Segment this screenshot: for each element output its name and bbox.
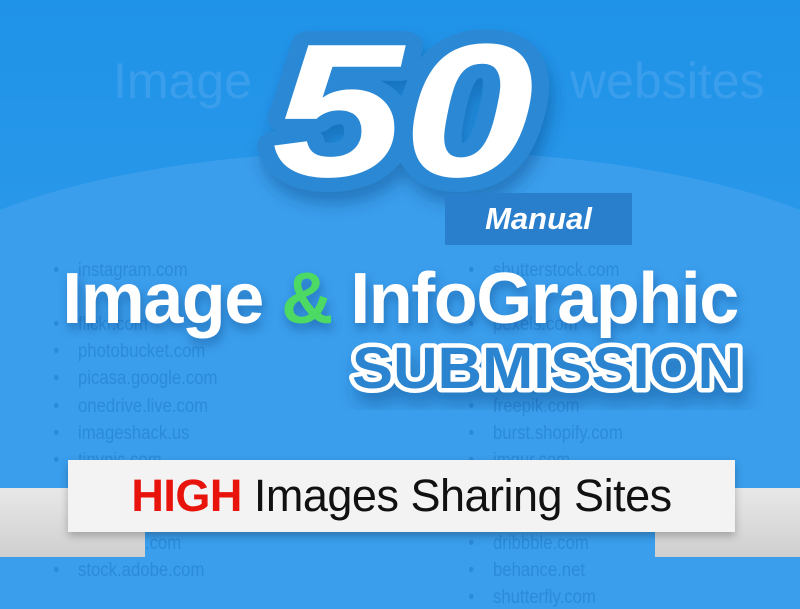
- Manual label: Manual: [485, 201, 592, 236]
- faint site list right: shutterfly.com: [493, 587, 596, 608]
- faint site list left: flickr.com: [78, 314, 148, 335]
- faint background heading: [113, 53, 765, 109]
- faint site list left: photobucket.com: [78, 341, 205, 362]
- ribbon right tail: [655, 488, 800, 557]
- faint site list left: unsplash.com: [78, 533, 181, 554]
- Manual label: [445, 193, 632, 245]
- background top band: [0, 0, 800, 250]
- text: Image: [113, 53, 252, 109]
- main title: Image & InfoGraphic: [62, 259, 738, 339]
- faint site list right: behance.net: [493, 560, 585, 581]
- faint site list right: shutterstock.com: [493, 260, 619, 281]
- ribbon banner: HIGH Images Sharing Sites: [131, 470, 672, 521]
- background wave: [0, 150, 800, 450]
- faint site list right: [469, 260, 623, 608]
- faint site list left: tinypic.com: [78, 450, 162, 471]
- faint site list left: picasa.google.com: [78, 368, 217, 389]
- ribbon left tail: [0, 488, 145, 557]
- faint site list right: freepik.com: [493, 396, 579, 417]
- faint site list left: stock.adobe.com: [78, 560, 204, 581]
- big number 50: 50: [272, 5, 534, 217]
- faint site list right: pexels.com: [493, 314, 578, 335]
- faint site list right: burst.shopify.com: [493, 423, 623, 444]
- text: websites: [570, 53, 765, 109]
- faint site list left: [54, 260, 217, 581]
- ribbon banner: [68, 460, 735, 532]
- faint site list right: imgur.com: [493, 450, 570, 471]
- faint site list left: instagram.com: [78, 260, 188, 281]
- faint site list right: dribbble.com: [493, 533, 589, 554]
- faint site list left: onedrive.live.com: [78, 396, 208, 417]
- faint site list left: imageshack.us: [78, 423, 190, 444]
- SUBMISSION: SUBMISSION: [352, 336, 742, 401]
